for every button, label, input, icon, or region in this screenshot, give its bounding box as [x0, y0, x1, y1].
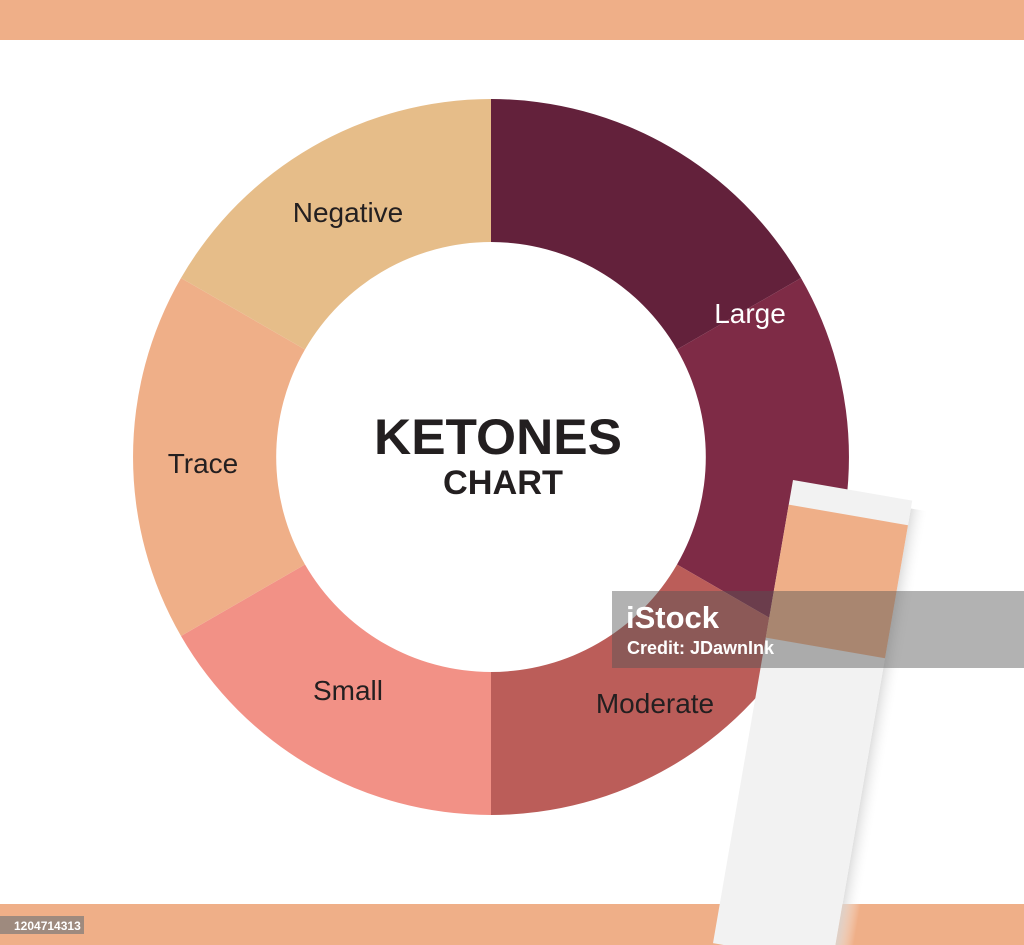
- segment: Trace: [133, 278, 305, 636]
- title: CHART: [443, 464, 563, 502]
- strip pad: [766, 505, 908, 658]
- watermark: Credit: JDawnInk: [627, 638, 775, 658]
- title: KETONES: [374, 409, 622, 465]
- segment: Moderate: [491, 564, 769, 815]
- label: Moderate: Moderate: [596, 688, 714, 719]
- bottom bar: [0, 904, 1024, 945]
- watermark: [612, 591, 1024, 668]
- watermark: iStock: [626, 600, 720, 635]
- segment: Negative: [181, 99, 491, 350]
- label: Negative: Negative: [293, 197, 403, 228]
- label: Small: Small: [313, 675, 383, 706]
- segment: Small: [181, 564, 491, 815]
- id label: [0, 916, 84, 934]
- label: Trace: Trace: [168, 448, 238, 479]
- segment: Large: [677, 278, 849, 636]
- test strip: [712, 480, 930, 945]
- top bar: [0, 0, 1024, 40]
- donut chart: [133, 99, 849, 815]
- label: Large: Large: [714, 298, 786, 329]
- title: [377, 419, 620, 494]
- id label: 1204714313: [14, 919, 81, 933]
- segment: Large dark: [491, 99, 801, 350]
